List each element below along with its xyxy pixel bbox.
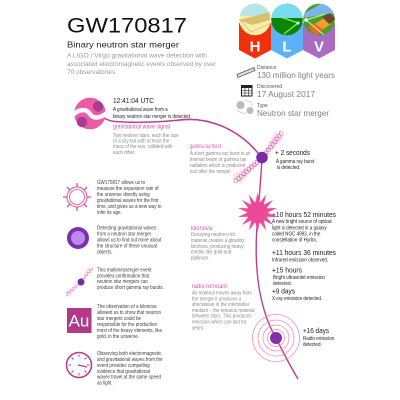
text: neutron star structure: from a neutron star merger bbox=[97, 231, 152, 238]
event: plus 15 hours: Bright ultraviolet emission bbox=[273, 275, 325, 281]
icon: L detector badge: L bbox=[282, 38, 292, 56]
distance stat: 130 million light years bbox=[257, 70, 335, 80]
intro text bbox=[67, 52, 217, 76]
event: plus 10 hours 52 minutes: +10 hours 52 minutes bbox=[272, 210, 336, 219]
event: plus 2 seconds: is detected. bbox=[277, 165, 300, 171]
event: plus 15 hours: +15 hours bbox=[272, 266, 302, 274]
discovered stat: Discovered bbox=[257, 84, 282, 90]
panel: gamma ray burst: A short gamma ray burst is an bbox=[190, 151, 251, 157]
panel: gamma ray burst: intense beam of gamma ray bbox=[190, 157, 247, 163]
text: multimessenger: neutron star mergers can bbox=[97, 279, 148, 285]
event: plus 10 hours 52 minutes: constellation of Hydra. bbox=[272, 237, 317, 244]
event: plus 2 seconds bbox=[275, 148, 315, 171]
text: neutron star structure: Detecting gravitational waves bbox=[97, 225, 157, 232]
panel: gamma ray burst: just after the merger. bbox=[189, 169, 232, 175]
panel: radio remnant: between stars. This produces bbox=[192, 313, 252, 320]
panel: gravitational wave signal: of a city but with at least the bbox=[113, 138, 169, 145]
text: kilonova gold: allowed us to show that neutron bbox=[97, 310, 161, 316]
panel: kilonova: platinum. bbox=[191, 255, 209, 262]
icon: V detector badge: V bbox=[314, 38, 324, 56]
event: plus 9 days: X-ray emission detected. bbox=[272, 296, 322, 302]
panel: gravitational wave signal: Two neutron stars, each the size bbox=[113, 133, 179, 139]
event: plus 15 hours bbox=[272, 266, 325, 287]
event: plus 9 days: +9 days bbox=[272, 286, 295, 296]
text: speed of gravity bbox=[97, 351, 163, 387]
panel: radio remnant bbox=[192, 284, 255, 332]
icon: expansion ring bbox=[63, 183, 91, 211]
event: merger detected: 12:41:04 UTC bbox=[113, 96, 155, 105]
text: expansion rate: GW170817 allows us to bbox=[97, 180, 145, 186]
panel: radio remnant: emission which can last for bbox=[192, 319, 247, 326]
icon: clock bbox=[66, 352, 92, 378]
icon: H detector badge bbox=[239, 3, 271, 58]
text: speed of gravity: and gravitational waves from the bbox=[97, 357, 163, 363]
timeline curve bbox=[104, 118, 298, 379]
text: multimessenger: produce short gamma ray bursts. bbox=[97, 285, 164, 291]
text: expansion rate bbox=[97, 180, 162, 216]
event: plus 15 hours: detected. bbox=[273, 281, 292, 287]
event: plus 11 hours 36 minutes: +11 hours 36 minutes bbox=[272, 248, 336, 257]
text: speed of gravity: waves travel at the same speed bbox=[97, 374, 161, 381]
icon: calendar bbox=[242, 85, 252, 96]
icon: merger type bbox=[236, 101, 254, 114]
text: expansion rate: the universe directly using bbox=[97, 192, 150, 198]
icon: small gamma ray beam bbox=[64, 267, 93, 297]
text: neutron star structure: objects. bbox=[97, 249, 113, 256]
icon: gold element tile bbox=[67, 308, 92, 333]
icon: neutron star bbox=[67, 227, 89, 249]
text: multimessenger: provides confirmation that bbox=[97, 273, 150, 280]
text: kilonova gold: most of the heavy elements, like bbox=[97, 328, 162, 334]
icon: H detector badge: H bbox=[250, 38, 260, 56]
panel: kilonova: kilonova bbox=[191, 226, 213, 232]
event: plus 2 seconds: + 2 seconds bbox=[275, 148, 310, 157]
event: plus 16 days: Radio emission bbox=[303, 336, 334, 342]
text: speed of gravity: event provides compelling bbox=[97, 363, 150, 369]
distance stat bbox=[257, 65, 335, 80]
text: multimessenger bbox=[97, 267, 164, 291]
event: plus 11 hours 36 minutes: Infrared emission observed. bbox=[272, 257, 328, 264]
text: expansion rate: infer its age. bbox=[97, 210, 122, 216]
icon: L detector badge bbox=[271, 3, 303, 58]
text: expansion rate: time, and gives us a new way to bbox=[97, 204, 162, 210]
text: kilonova gold bbox=[97, 304, 162, 340]
panel: gravitational wave signal bbox=[113, 124, 179, 156]
text: neutron star structure bbox=[97, 225, 162, 256]
event: merger detected: binary neutron star merger is detected. bbox=[113, 114, 191, 120]
event: merger detected bbox=[113, 96, 191, 120]
text: speed of gravity: as light. bbox=[97, 380, 113, 387]
icon: kilonova burst bbox=[238, 192, 277, 232]
panel: radio remnant: radio remnant bbox=[192, 284, 227, 290]
event: plus 10 hours 52 minutes: called NGC 4993, in the bbox=[272, 231, 321, 238]
discovered stat: 17 August 2017 bbox=[257, 89, 315, 99]
text: kilonova gold: responsible for the production bbox=[97, 322, 157, 328]
distance stat: Distance bbox=[257, 65, 277, 71]
panel: radio remnant: the merger it produces a bbox=[192, 296, 242, 303]
text: speed of gravity: evidence that gravitational bbox=[97, 369, 150, 375]
subtitle: Binary neutron star merger bbox=[67, 40, 179, 50]
panel: gravitational wave signal: mass of the sun, collided with bbox=[113, 144, 173, 150]
panel: gamma ray burst bbox=[189, 144, 251, 175]
panel: radio remnant: As material moves away from bbox=[192, 290, 252, 297]
text: expansion rate: measure the expansion rate of bbox=[97, 186, 159, 192]
text: neutron star structure: the structure of these unusual bbox=[97, 243, 157, 250]
panel: kilonova: kilonova, producing heavy bbox=[191, 244, 244, 250]
icon: radio rings bbox=[252, 314, 300, 362]
panel: gravitational wave signal: each other. bbox=[113, 150, 136, 156]
event: plus 16 days bbox=[303, 326, 334, 348]
panel: kilonova: metals like gold and bbox=[191, 249, 232, 256]
type stat: Type bbox=[257, 103, 268, 109]
discovered stat bbox=[257, 84, 315, 99]
icon: gamma ray beam bbox=[180, 119, 284, 184]
panel: gamma ray burst: radiation which is produced bbox=[190, 163, 245, 169]
text: kilonova gold: The observation of a kilonova bbox=[97, 304, 157, 310]
event: plus 10 hours 52 minutes: light is detected in a galaxy bbox=[272, 225, 327, 232]
event: plus 16 days: +16 days bbox=[303, 326, 329, 335]
icon: ruler bbox=[237, 68, 255, 78]
event: plus 11 hours 36 minutes bbox=[272, 248, 336, 264]
event: plus 9 days bbox=[272, 286, 322, 302]
text: kilonova gold: star mergers could be bbox=[97, 316, 141, 322]
type stat bbox=[257, 103, 329, 118]
event: plus 10 hours 52 minutes bbox=[272, 210, 336, 244]
event: plus 10 hours 52 minutes: A new bright source of optical bbox=[272, 219, 332, 225]
icon: V detector badge bbox=[303, 3, 336, 58]
icon: gold element tile: Au bbox=[69, 312, 89, 330]
panel: kilonova bbox=[191, 226, 244, 262]
panel: gamma ray burst: gamma ray burst bbox=[190, 144, 221, 150]
panel: kilonova: Decaying neutron-rich bbox=[191, 232, 236, 238]
panel: kilonova: material creates a glowing bbox=[191, 238, 244, 244]
panel: radio remnant: shockwave in the interstellar bbox=[192, 302, 250, 308]
title: GW170817 bbox=[67, 14, 187, 38]
intro text: associated electromagnetic events observed by over bbox=[67, 61, 217, 68]
text: kilonova gold: gold, in the universe. bbox=[97, 334, 139, 340]
text: speed of gravity: Observing both electromagnetic bbox=[97, 351, 162, 357]
event: merger detected: A gravitational wave from a bbox=[113, 107, 168, 113]
text: multimessenger: This multimessenger event bbox=[97, 267, 152, 274]
event: plus 2 seconds: A gamma ray burst bbox=[276, 159, 315, 165]
panel: radio remnant: medium – the tenuous material bbox=[192, 308, 255, 314]
intro text: 70 observatories. bbox=[67, 69, 117, 76]
panel: radio remnant: years. bbox=[192, 325, 204, 332]
icon: merging neutron stars bbox=[72, 98, 108, 129]
event: plus 16 days: detected. bbox=[303, 342, 322, 348]
panel: gravitational wave signal: gravitational wave signal bbox=[113, 124, 170, 130]
intro text: A LIGO / Virgo gravitational wave detection with bbox=[67, 52, 207, 60]
type stat: Neutron star merger bbox=[257, 108, 329, 118]
text: neutron star structure: allows us to find out more about bbox=[97, 237, 162, 244]
text: expansion rate: gravitational waves for the first bbox=[97, 198, 159, 204]
